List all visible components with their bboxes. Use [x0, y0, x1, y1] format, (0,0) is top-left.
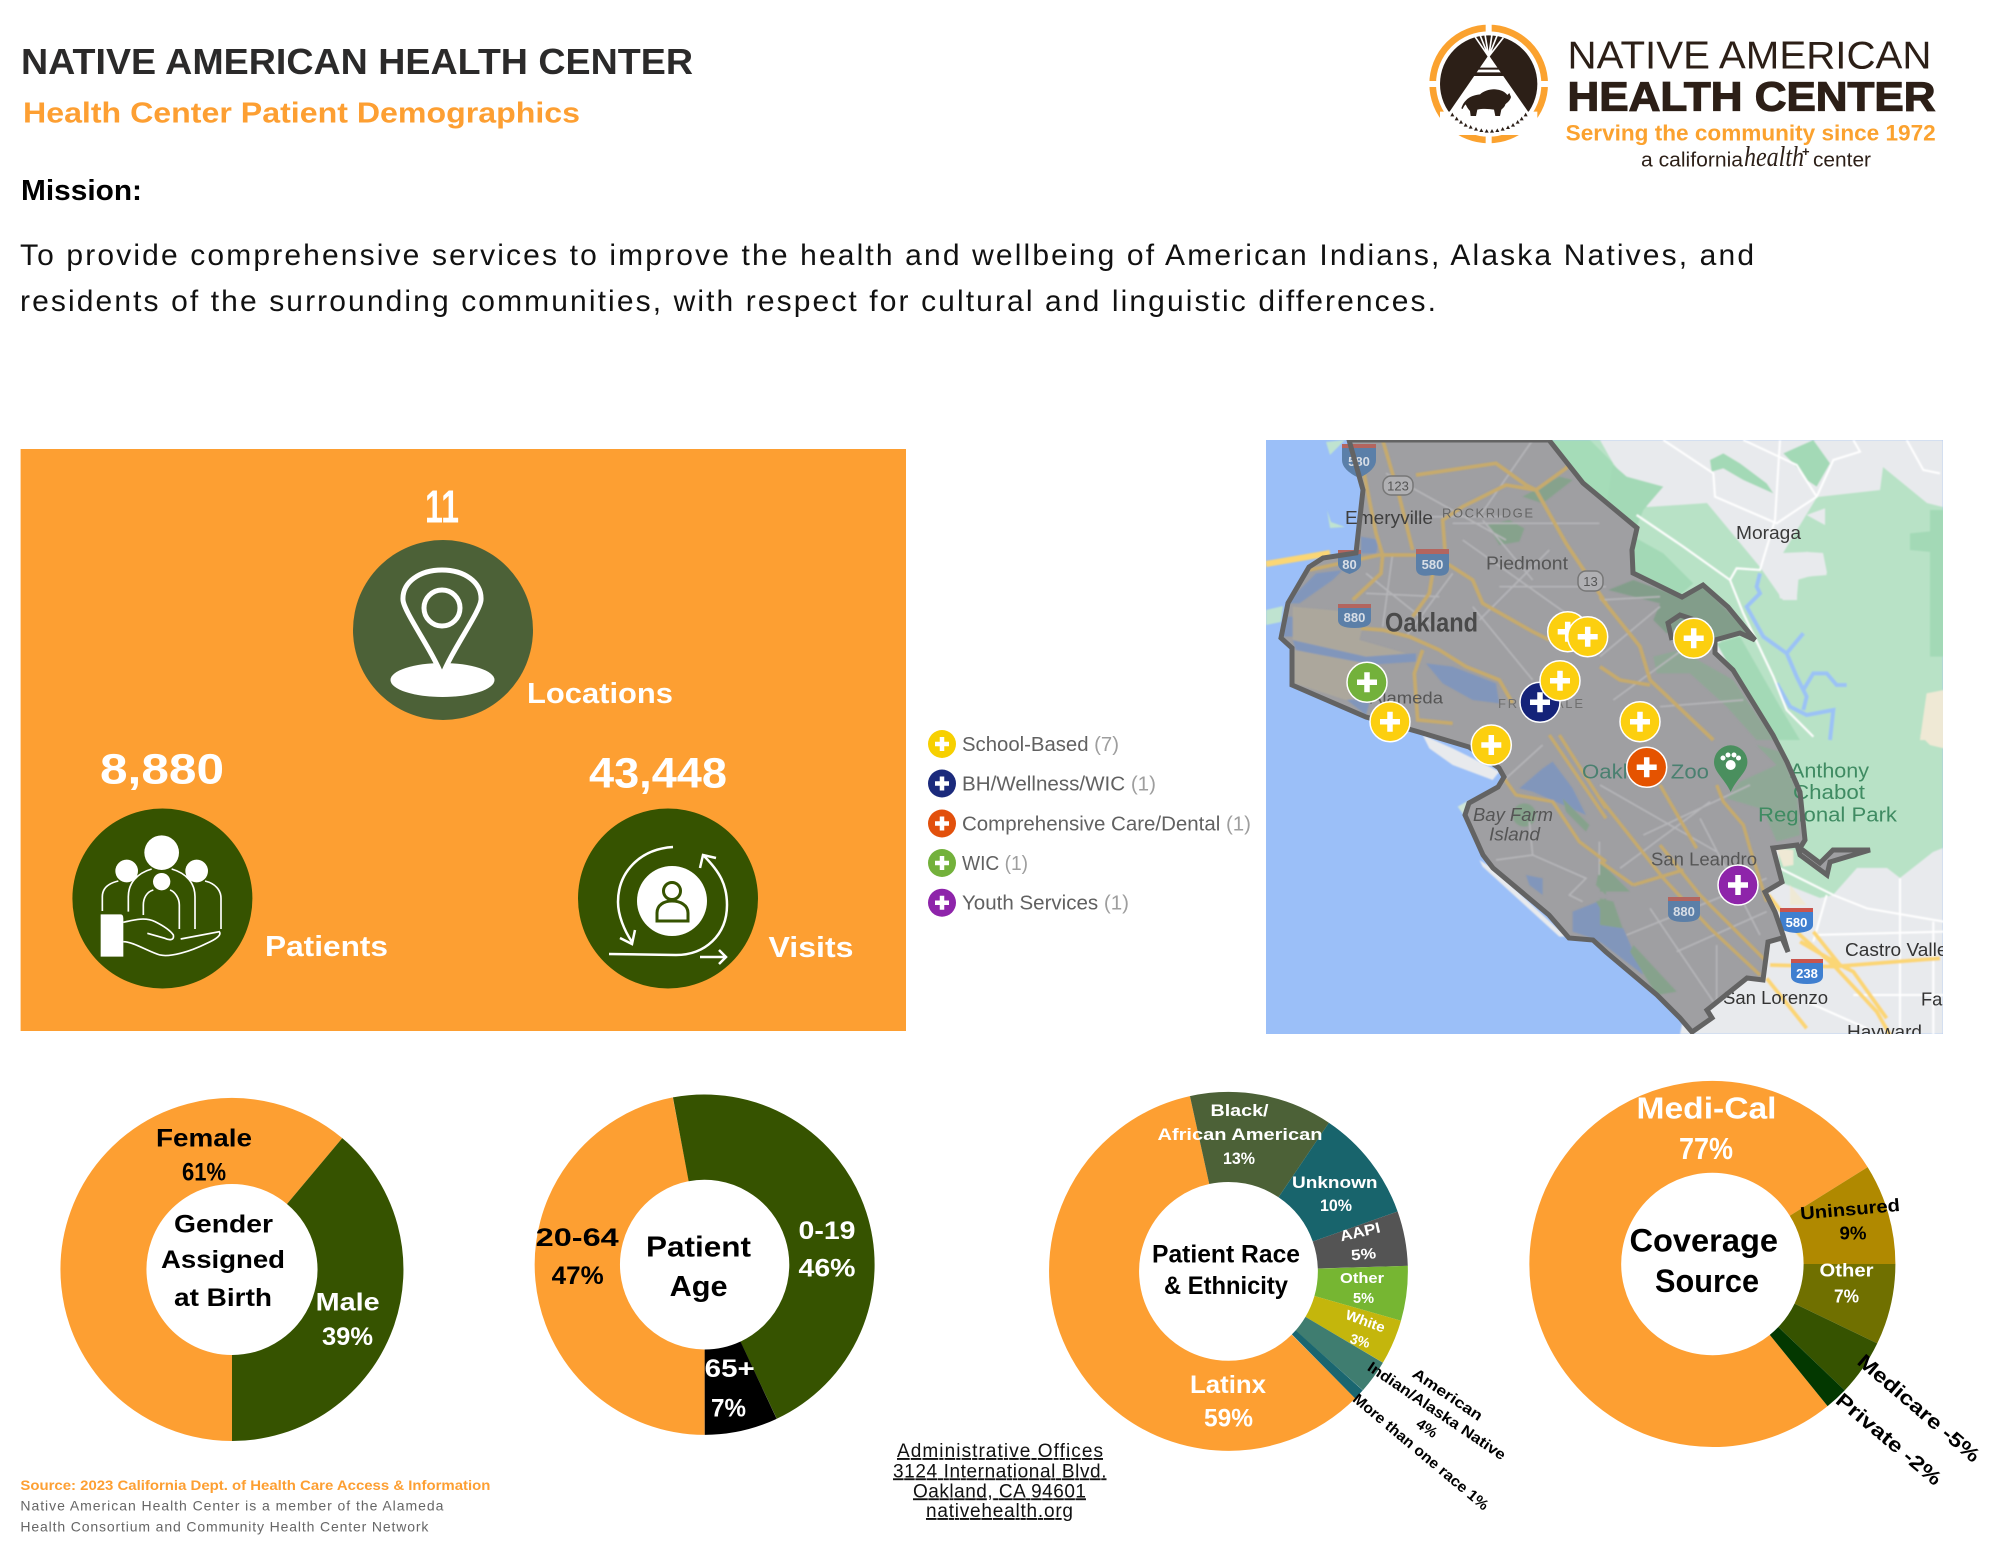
- northeast region: [1600, 580, 1777, 740]
- legend: BH/Wellness/WIC: BH/Wellness/WIC (1): [962, 774, 1156, 796]
- labels: race: American: [1409, 1365, 1486, 1425]
- legend: comprehensive care: Comprehensive Care/Dental (1): [962, 814, 1251, 836]
- map place labels: Castro Valley: [1845, 940, 1957, 960]
- logo: +: [1802, 144, 1810, 159]
- marker: school: [1548, 612, 1588, 652]
- labels: race: More than one race 1%: [1349, 1390, 1492, 1514]
- map: [1266, 440, 1990, 1042]
- legend: BH/Wellness/WIC: [928, 770, 1156, 798]
- labels: coverage: Medi-Cal: [1636, 1090, 1776, 1125]
- labels: gender: Assigned: [161, 1246, 285, 1274]
- labels: coverage: Coverage: [1630, 1223, 1778, 1259]
- labels: gender: 61%: [182, 1159, 226, 1187]
- labels: race: Other: [1340, 1270, 1384, 1287]
- stat: patients: 8,880: [100, 746, 224, 794]
- map place labels: Oakland Zoo: [1582, 761, 1709, 783]
- marker: school: [1471, 725, 1511, 765]
- slice: White: [1344, 1308, 1358, 1340]
- labels: race: [1152, 1101, 1509, 1514]
- source footnote: [20, 1477, 490, 1535]
- mission heading: Mission:: [21, 175, 142, 207]
- labels: age: 65+: [705, 1355, 755, 1383]
- stat: visits: [578, 750, 854, 988]
- logo: health: [1744, 142, 1804, 173]
- labels: race: 5%: [1353, 1290, 1374, 1307]
- chart: patient race and ethnicity: [1094, 1101, 1509, 1514]
- labels: gender: [156, 1125, 380, 1351]
- map place labels: Anthony: [1790, 760, 1869, 782]
- labels: race: Patient Race: [1152, 1241, 1300, 1269]
- stat: visits: Visits: [768, 932, 854, 964]
- map place labels: San Leandro: [1651, 850, 1757, 870]
- labels: race: 59%: [1204, 1405, 1253, 1433]
- chart: coverage source: [1575, 1090, 1984, 1490]
- map place labels: [1345, 505, 1990, 1042]
- stat: patients: Patients: [265, 931, 388, 963]
- panel: key statistics: [21, 449, 906, 1031]
- subtitle: Health Center Patient Demographics: [23, 98, 580, 130]
- icon: location pin: [353, 540, 533, 720]
- labels: race: African American: [1158, 1125, 1322, 1144]
- slice: Other: [1836, 1264, 1850, 1324]
- labels: race: Indian/Alaska Native: [1364, 1359, 1509, 1464]
- highway shields: 880: [1673, 904, 1695, 919]
- map place labels: San Lorenzo: [1723, 988, 1828, 1008]
- icon: people in hand: [101, 835, 221, 957]
- legend: youth services: Youth Services (1): [962, 893, 1129, 915]
- labels: coverage: Uninsured: [1799, 1195, 1901, 1224]
- map place labels: Island: [1489, 825, 1541, 845]
- stat: patients: [72, 746, 388, 988]
- highway shields: 238: [1796, 966, 1818, 981]
- labels: gender: 39%: [322, 1323, 373, 1351]
- marker: school: [1540, 661, 1580, 701]
- slice: female: [103, 1141, 315, 1398]
- highway shields: 880: [1344, 610, 1365, 625]
- labels: age: Patient: [646, 1232, 751, 1264]
- legend: WIC: WIC (1): [962, 853, 1028, 875]
- labels: gender: at Birth: [174, 1284, 272, 1312]
- labels: race: 3%: [1348, 1330, 1372, 1351]
- slice: AAPI: [1355, 1226, 1363, 1267]
- highway shields: 580: [1422, 557, 1443, 572]
- labels: coverage: 77%: [1679, 1131, 1733, 1166]
- labels: coverage: 9%: [1840, 1223, 1866, 1243]
- map place labels: Moraga: [1736, 523, 1802, 543]
- logo: Serving the community since 1972: [1566, 121, 1936, 146]
- labels: age: 47%: [552, 1262, 604, 1290]
- labels: coverage: [1630, 1090, 1984, 1490]
- logo: [1427, 23, 1936, 173]
- labels: coverage: Medicare -5%: [1853, 1350, 1984, 1467]
- labels: age: 46%: [798, 1255, 856, 1283]
- marker: comprehensive care: [1627, 747, 1667, 787]
- labels: gender: Male: [316, 1289, 380, 1317]
- logo emblem: [1427, 23, 1550, 145]
- slice: Unknown: [1304, 1160, 1355, 1226]
- legend: WIC: [928, 849, 1028, 877]
- map place labels: ROCKRIDGE: [1442, 505, 1533, 520]
- service area boundary: [1281, 440, 1870, 1032]
- administrative offices address: nativehealth.org: [926, 1501, 1073, 1522]
- title: NATIVE AMERICAN HEALTH CENTER: [21, 41, 693, 82]
- marker: youth services: [1718, 865, 1758, 905]
- highway shields: 580: [1348, 454, 1370, 469]
- mission text: [20, 239, 1754, 318]
- highway shields: 123: [1387, 478, 1409, 494]
- labels: coverage: Source: [1655, 1263, 1759, 1299]
- map place labels: Alameda: [1370, 688, 1444, 707]
- administrative offices address: 3124 International Blvd.: [893, 1461, 1106, 1482]
- map place labels: Emeryville: [1345, 508, 1433, 528]
- highway shields: 580: [1786, 915, 1807, 930]
- highway shields: 80: [1342, 557, 1357, 572]
- labels: age: Age: [670, 1271, 728, 1303]
- labels: race: White: [1343, 1306, 1388, 1336]
- chart: patient age: [536, 1137, 856, 1423]
- icon: zoo paw pin: [1714, 745, 1747, 792]
- map place labels: FRUITVALE: [1498, 696, 1583, 711]
- logo: center: [1813, 150, 1871, 172]
- administrative offices address: [893, 1441, 1106, 1522]
- labels: race: 13%: [1223, 1149, 1255, 1168]
- map place labels: Fairview: [1921, 990, 1990, 1010]
- map legend: [928, 730, 1251, 917]
- north region: [1283, 440, 1606, 723]
- slice: Latinx: [1094, 1140, 1324, 1406]
- mission text: residents of the surrounding communities, with respect for cultural and linguistic differences.: [20, 285, 1436, 318]
- mission text: To provide comprehensive services to improve the health and wellbeing of American Indians, Alaska Natives, and: [20, 239, 1754, 272]
- slice: 20-64: [577, 1139, 705, 1392]
- slice: 0-19: [681, 1137, 832, 1380]
- legend: school-based: School-Based (7): [962, 734, 1119, 756]
- marker: WIC: [1347, 662, 1387, 702]
- slice: Uninsured: [1829, 1191, 1850, 1264]
- marker: school: [1568, 617, 1608, 657]
- labels: age: 7%: [711, 1395, 746, 1423]
- labels: coverage: 7%: [1834, 1287, 1859, 1307]
- map place labels: Hayward: [1847, 1022, 1922, 1042]
- labels: race: AAPI: [1338, 1220, 1382, 1245]
- labels: race: & Ethnicity: [1164, 1272, 1288, 1300]
- source footnote: Health Consortium and Community Health Center Network: [20, 1519, 429, 1535]
- marker: school: [1674, 618, 1714, 658]
- labels: race: Latinx: [1190, 1371, 1266, 1399]
- marker: school Alameda: [1370, 702, 1410, 742]
- map place labels: Bay Farm: [1473, 805, 1553, 825]
- marker: BH/Wellness/WIC: [1520, 682, 1560, 722]
- map place labels: Regional Park: [1758, 805, 1898, 827]
- administrative offices address: Oakland, CA 94601: [913, 1481, 1086, 1502]
- map place labels: Oakland: [1385, 608, 1478, 638]
- stat: locations: Locations: [527, 678, 673, 710]
- terrain outside service area: [1266, 440, 1944, 1035]
- logo: HEALTH CENTER: [1568, 74, 1936, 120]
- slice: More than one race: [1324, 1360, 1329, 1366]
- slice: 65+: [705, 1380, 759, 1392]
- labels: age: 0-19: [798, 1217, 856, 1245]
- logo wordmark: NATIVE AMERICAN: [1568, 34, 1932, 77]
- map place labels: Piedmont: [1486, 553, 1568, 573]
- chart: gender assigned at birth: [103, 1125, 380, 1398]
- labels: race: Unknown: [1292, 1173, 1378, 1192]
- logo: a california: [1641, 150, 1744, 172]
- southeast region: [1600, 745, 1800, 1012]
- slice: Black/African American: [1200, 1137, 1304, 1160]
- icon: person in cycle arrows: [609, 847, 727, 964]
- labels: race: 5%: [1350, 1245, 1377, 1264]
- slice: Other: [1358, 1267, 1363, 1308]
- stat: locations: 11: [425, 480, 459, 532]
- labels: gender: Female: [156, 1125, 252, 1153]
- slice: male: [232, 1171, 360, 1398]
- administrative offices address: Administrative Offices: [897, 1441, 1103, 1462]
- labels: coverage: Private -2%: [1831, 1389, 1946, 1490]
- slice: American Indian/Alaska Native: [1329, 1340, 1344, 1360]
- labels: coverage: Other: [1820, 1261, 1874, 1281]
- legend: school-based: [928, 730, 1119, 758]
- slice: Medi-Cal: [1575, 1127, 1829, 1401]
- highway shields: 13: [1583, 574, 1598, 589]
- southwest region: [1496, 735, 1606, 945]
- labels: race: Black/: [1210, 1101, 1269, 1120]
- stat: locations: [353, 480, 673, 720]
- marker: school: [1620, 702, 1660, 742]
- labels: age: 20-64: [536, 1224, 619, 1252]
- region detail: [1283, 440, 1800, 1012]
- labels: race: 4%: [1413, 1415, 1440, 1442]
- map markers: [1347, 612, 1758, 905]
- service area region: [1281, 440, 1870, 1032]
- slice: Medicare: [1812, 1324, 1836, 1359]
- labels: age: [536, 1217, 856, 1423]
- slice: Private: [1799, 1359, 1812, 1370]
- stat: visits: 43,448: [589, 750, 727, 798]
- legend: youth services: [928, 889, 1129, 917]
- labels: gender: Gender: [174, 1211, 273, 1239]
- map place labels: Chabot: [1793, 782, 1865, 804]
- labels: race: 10%: [1320, 1196, 1352, 1215]
- highway shields: [1338, 444, 1823, 984]
- source footnote: Source: 2023 California Dept. of Health Care Access & Information: [20, 1477, 490, 1493]
- source footnote: Native American Health Center is a member of the Alameda: [20, 1498, 444, 1514]
